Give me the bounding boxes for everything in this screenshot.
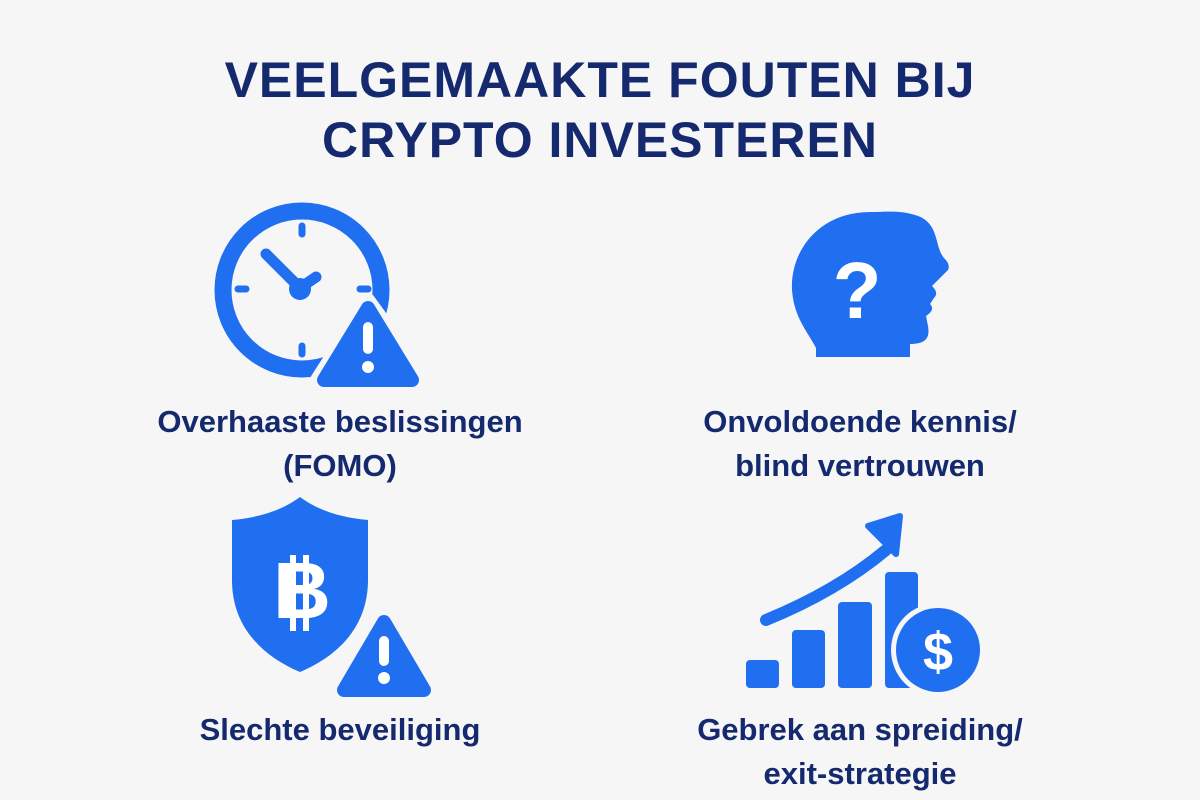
label: FOMO	[157, 404, 523, 483]
icon: shield with bitcoin and warning: B	[273, 546, 331, 635]
title: CRYPTO INVESTEREN	[322, 112, 878, 168]
label: spreiding: exit-strategie	[764, 756, 956, 791]
label: kennis	[703, 404, 1017, 483]
icon: shield with bitcoin and warning	[232, 497, 452, 705]
icon: bar chart with arrow and coin	[746, 516, 985, 697]
title	[225, 52, 975, 168]
icon: head with question mark	[792, 212, 949, 357]
label: spreiding: Gebrek aan spreiding/	[697, 712, 1023, 747]
label: FOMO: Overhaaste beslissingen	[157, 404, 523, 439]
icon: clock with warning	[223, 211, 436, 394]
label: FOMO: (FOMO)	[283, 448, 397, 483]
title: VEELGEMAAKTE FOUTEN BIJ	[225, 52, 975, 108]
label: kennis: Onvoldoende kennis/	[703, 404, 1017, 439]
icon: bar chart with arrow and coin: $	[923, 622, 953, 682]
label: spreiding	[697, 712, 1023, 791]
label: beveiliging: Slechte beveiliging	[200, 712, 480, 747]
icon: head with question mark: ?	[833, 246, 881, 335]
label: kennis: blind vertrouwen	[735, 448, 985, 483]
